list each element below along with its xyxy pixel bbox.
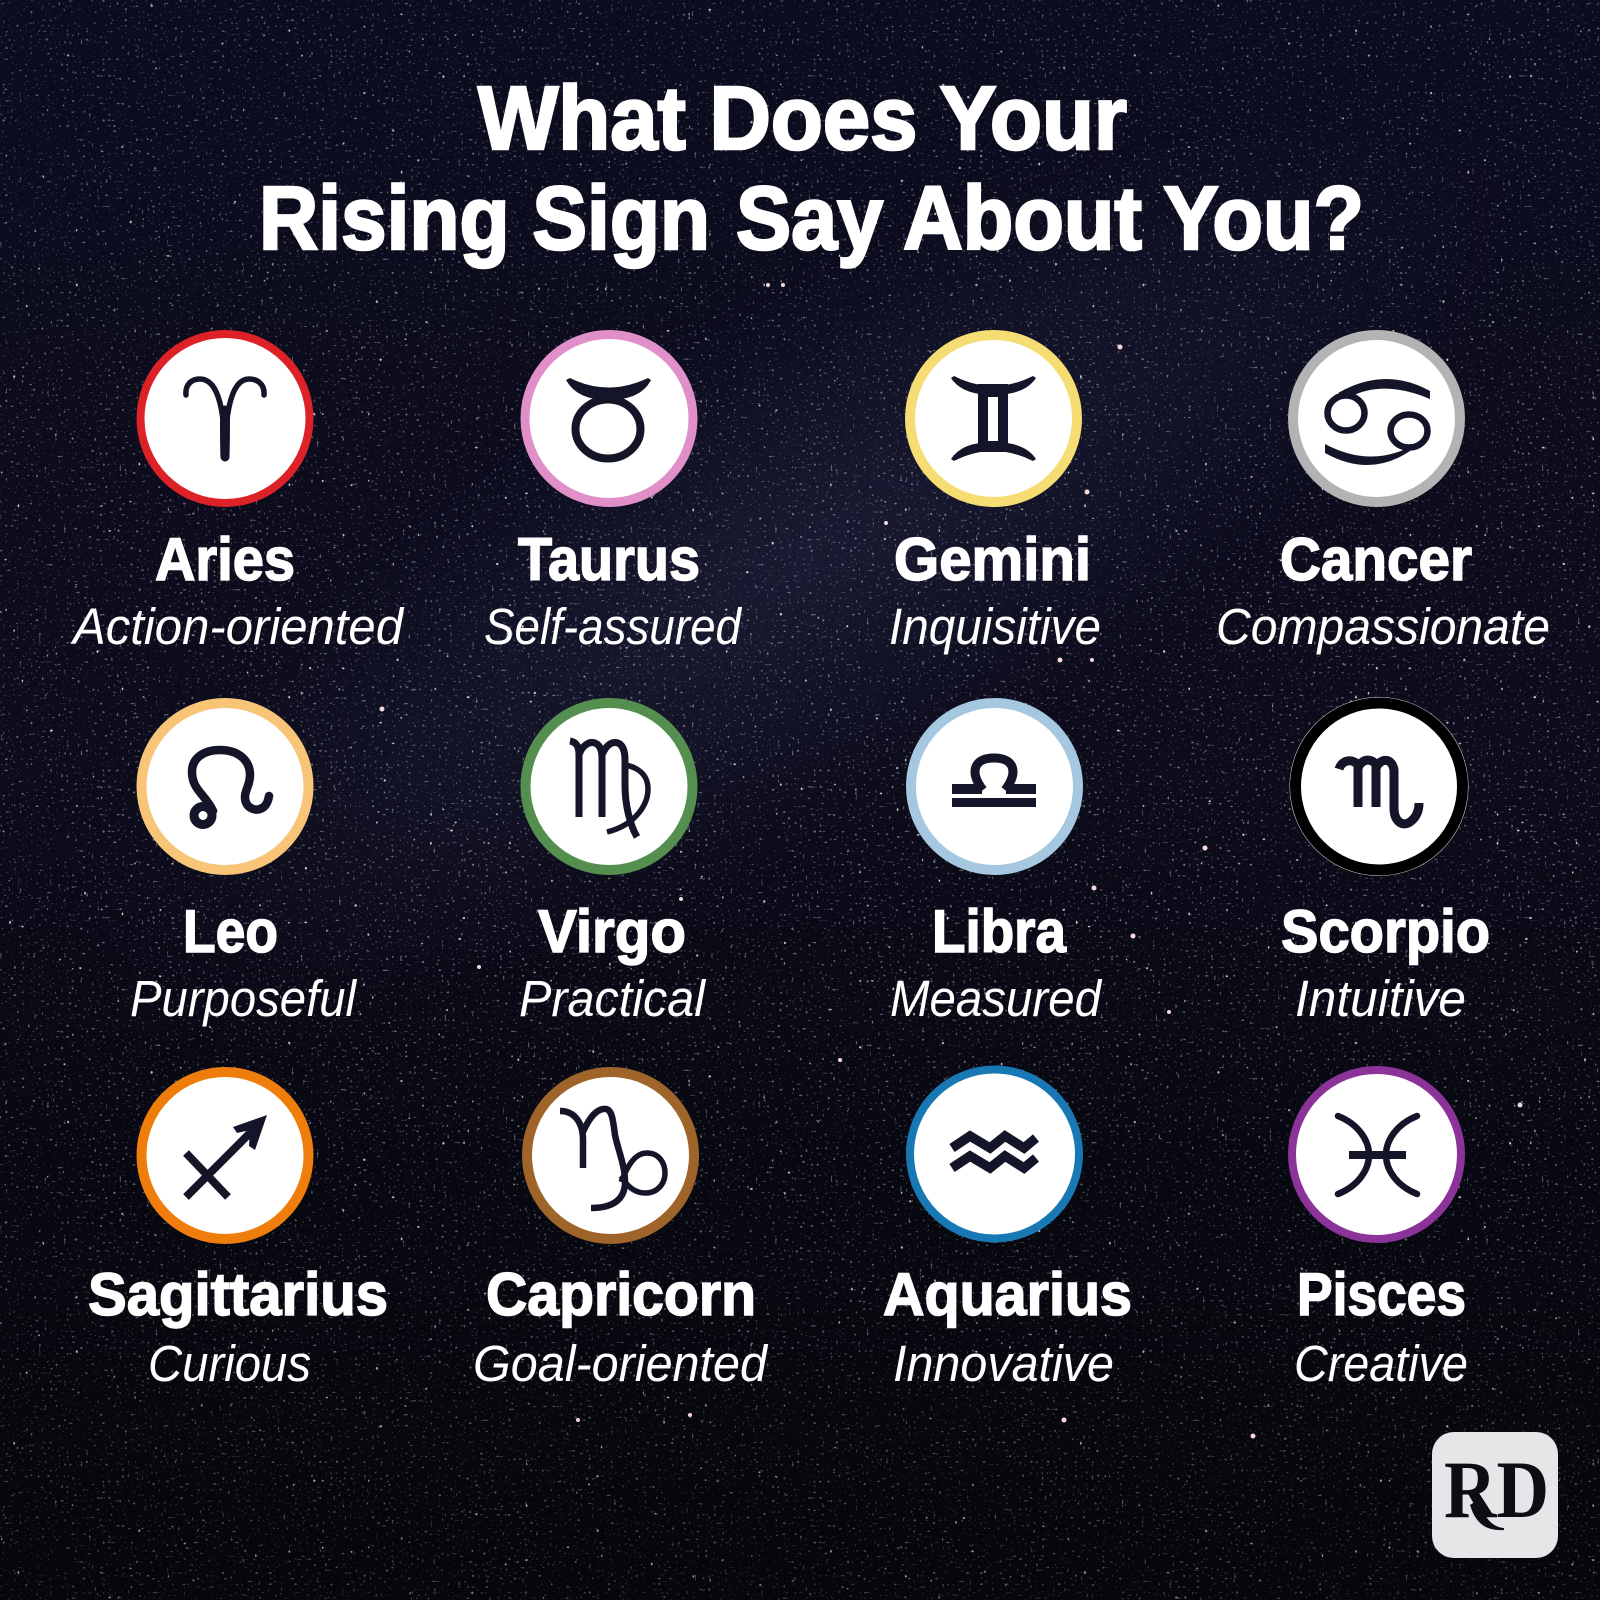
trait: Self-assured: Self-assured (484, 598, 742, 655)
name: Virgo: Virgo (538, 898, 686, 965)
title (259, 69, 1364, 269)
panel: Scorpio (1281, 697, 1490, 1027)
panel: Aquarius (883, 1070, 1132, 1392)
panel: Taurus (484, 334, 742, 655)
panel: Pisces (1292, 1070, 1468, 1392)
name: Aries: Aries (155, 526, 295, 593)
name: Aquarius: Aquarius (883, 1261, 1132, 1328)
name: Sagittarius: Sagittarius (88, 1261, 388, 1328)
icon: Aries badge (140, 334, 310, 503)
name: Scorpio: Scorpio (1281, 898, 1490, 965)
trait: Curious: Curious (148, 1335, 311, 1392)
panel: Sagittarius (88, 1072, 388, 1392)
trait: Inquisitive: Inquisitive (889, 598, 1101, 655)
trait: Action-oriented: Action-oriented (70, 598, 405, 655)
name: Cancer: Cancer (1280, 526, 1472, 593)
title: Say About You? (736, 169, 1364, 269)
icon: Leo badge (142, 703, 308, 870)
icon: Virgo badge (526, 703, 692, 870)
logo: RD badge (1432, 1432, 1558, 1558)
trait: Measured: Measured (890, 970, 1103, 1027)
trait: Purposeful: Purposeful (130, 970, 358, 1027)
trait: Creative: Creative (1294, 1335, 1468, 1392)
trait: Intuitive: Intuitive (1295, 970, 1466, 1027)
panel: Capricorn (473, 1072, 769, 1392)
panel: Gemini (889, 335, 1101, 655)
panel: Leo (130, 703, 358, 1027)
icon: Aquarius badge (910, 1070, 1079, 1238)
panel: Virgo (519, 703, 707, 1027)
name: Gemini: Gemini (894, 526, 1091, 593)
trait: Innovative: Innovative (893, 1335, 1114, 1392)
icon: Scorpio badge (1290, 697, 1468, 876)
panel: Libra (890, 703, 1103, 1027)
panel: Aries (70, 334, 405, 655)
icon: Sagittarius badge (142, 1072, 308, 1239)
logo: RD badge: RD (1444, 1444, 1549, 1535)
name: Leo: Leo (183, 898, 278, 965)
title: What Does Your (478, 69, 1127, 169)
icon: Gemini badge (910, 335, 1077, 502)
icon: Pisces badge (1292, 1070, 1461, 1239)
name: Taurus: Taurus (518, 526, 700, 593)
name: Libra: Libra (932, 898, 1067, 965)
panel: Cancer (1216, 335, 1550, 655)
icon: Libra badge (911, 703, 1078, 870)
trait: Goal-oriented: Goal-oriented (473, 1335, 769, 1392)
icon: Capricorn badge (527, 1072, 694, 1239)
name: Capricorn: Capricorn (486, 1261, 756, 1328)
title: Rising Sign (259, 169, 710, 269)
name: Pisces: Pisces (1297, 1261, 1466, 1328)
trait: Practical: Practical (519, 970, 707, 1027)
icon: Cancer badge (1293, 335, 1460, 502)
trait: Compassionate: Compassionate (1216, 598, 1550, 655)
icon: Taurus badge (525, 334, 693, 502)
